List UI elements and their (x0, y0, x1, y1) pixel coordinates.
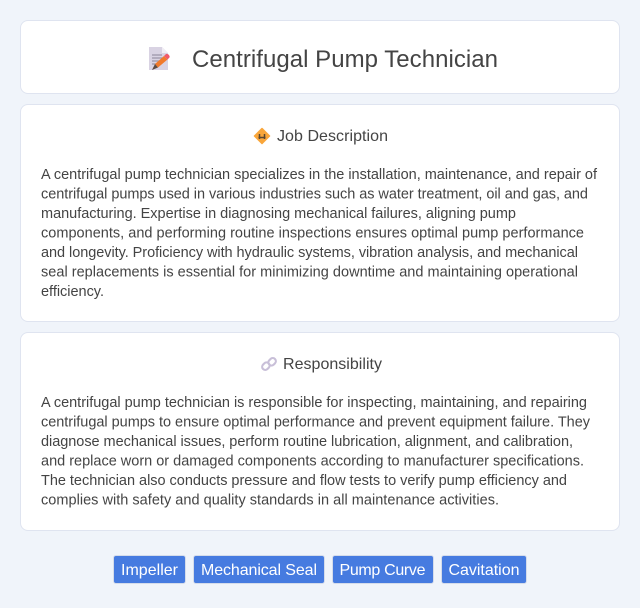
icon: chain link (261, 357, 277, 371)
tag: cavitation: Cavitation (448, 562, 520, 579)
text block: job description: A centrifugal pump technician specializes in the installation, maintenance, and repair of (41, 167, 598, 183)
text block: job description (41, 167, 598, 300)
text block: responsibility: complies with safety and quality standards in all maintenance activities. (41, 492, 499, 508)
panel: responsibility (20, 332, 620, 531)
tag: cavitation (441, 555, 527, 584)
text block: responsibility: and replace worn or damaged components according to manufacturer specifications. (41, 454, 584, 470)
tag: mechanical seal (193, 555, 325, 584)
text block: responsibility: diagnose mechanical issues, perform routine lubrication, alignment, and calibration, (41, 434, 573, 450)
title: Centrifugal Pump Technician (192, 46, 498, 73)
text block: responsibility: centrifugal pumps to ensure optimal performance and prevent equipment failure. They (41, 414, 591, 430)
tag: mechanical seal: Mechanical Seal (201, 562, 317, 579)
panel: header (20, 20, 620, 94)
text block: job description: centrifugal pumps used in various industries such as water treatment, oil and gas, and (41, 186, 588, 202)
tag: impeller (113, 555, 186, 584)
heading: responsibility: Responsibility (283, 356, 382, 373)
text block: job description: components, and performing routine inspections ensures optimal pump performance (41, 226, 584, 242)
tag: pump curve (332, 555, 434, 584)
text block: responsibility: A centrifugal pump technician is responsible for inspecting, maintaining, and repairing (41, 395, 587, 411)
tag: pump curve: Pump Curve (340, 562, 426, 579)
text block: job description: efficiency. (41, 284, 104, 300)
text block: responsibility (41, 395, 591, 508)
text block: job description: and longevity. Proficiency with hydraulic systems, vibration analysis, and mechanical (41, 245, 578, 261)
heading: job description: Job Description (277, 128, 388, 145)
text block: job description: seal replacements is essential for minimizing downtime and maintaining operational (41, 264, 578, 280)
panel: job description (20, 104, 620, 322)
text block: job description: manufacturing. Expertise in diagnosing mechanical failures, aligning pump (41, 206, 516, 222)
icon: construction diamond (254, 128, 270, 144)
tag: impeller: Impeller (121, 562, 179, 579)
text block: responsibility: The technician also conducts pressure and flow tests to verify pump efficiency and (41, 473, 567, 489)
icon: memo with pencil (149, 47, 170, 70)
